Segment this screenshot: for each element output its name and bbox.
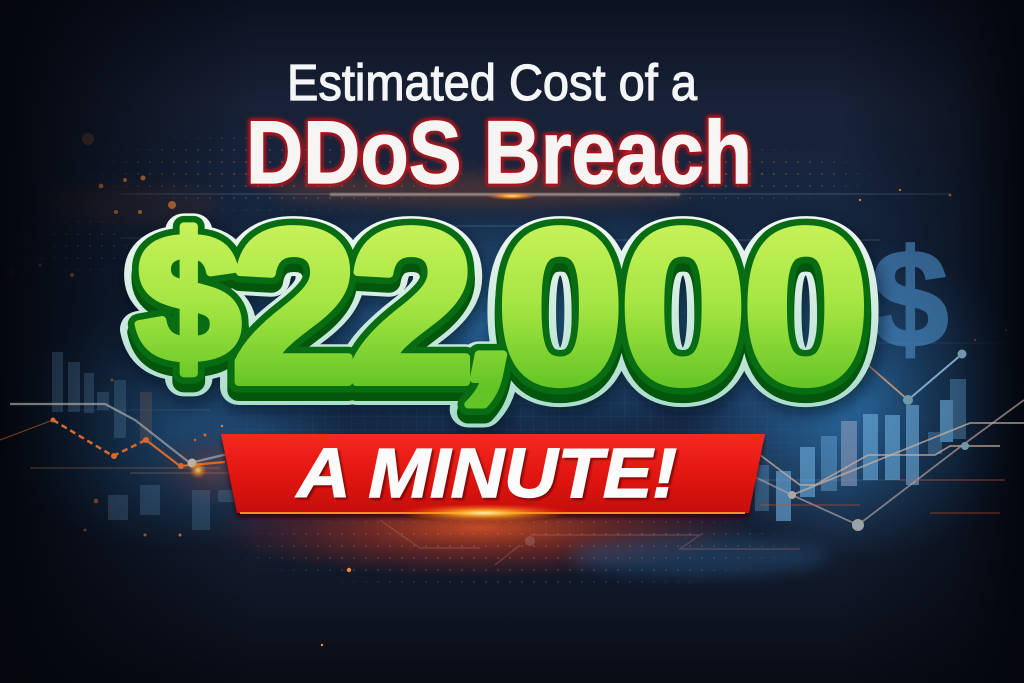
drop shadow: 22	[235, 197, 479, 441]
title line 2: DDoS Breach	[246, 102, 752, 202]
dark green extrusion: 000	[497, 193, 869, 437]
drop shadow: ,	[472, 242, 522, 426]
dark green extrusion: 22	[231, 193, 475, 437]
banner text: A MINUTE!	[295, 434, 677, 512]
dark green extrusion	[136, 193, 869, 437]
lime face: ,	[468, 230, 518, 414]
title line 2: DDoS Breach	[246, 102, 752, 202]
right faded dollar sign: $	[871, 220, 949, 377]
title line 1: Estimated Cost of a	[287, 54, 698, 111]
dark green extrusion: $	[136, 205, 240, 406]
dark green extrusion: ,	[468, 238, 518, 422]
amount: $22,000	[136, 185, 873, 441]
header light streak	[330, 192, 680, 200]
pale outer outline: 22	[231, 190, 475, 434]
dark green outline	[136, 185, 869, 429]
right stock chart	[755, 350, 1024, 531]
drop shadow: 000	[501, 197, 873, 441]
banner: a minute	[221, 434, 765, 522]
pale outer outline: 000	[497, 190, 869, 434]
decorative sparks	[4, 133, 1007, 646]
lime face: $	[136, 197, 240, 398]
left stock chart	[0, 352, 240, 530]
pale outer outline: ,	[468, 235, 518, 419]
pale outer outline: $	[136, 202, 240, 403]
dark green outline: ,	[468, 230, 518, 414]
dark green outline: $	[136, 197, 240, 398]
title line 2: DDoS Breach	[246, 102, 752, 202]
pale outer outline	[136, 190, 869, 434]
dark green outline: 22	[231, 185, 475, 429]
lime face: 000	[497, 185, 869, 429]
dark green outline: 000	[497, 185, 869, 429]
drop shadow: $	[140, 209, 244, 410]
banner flare	[240, 512, 745, 514]
lime face	[136, 185, 869, 429]
drop shadow	[140, 197, 873, 441]
lime face: 22	[231, 185, 475, 429]
